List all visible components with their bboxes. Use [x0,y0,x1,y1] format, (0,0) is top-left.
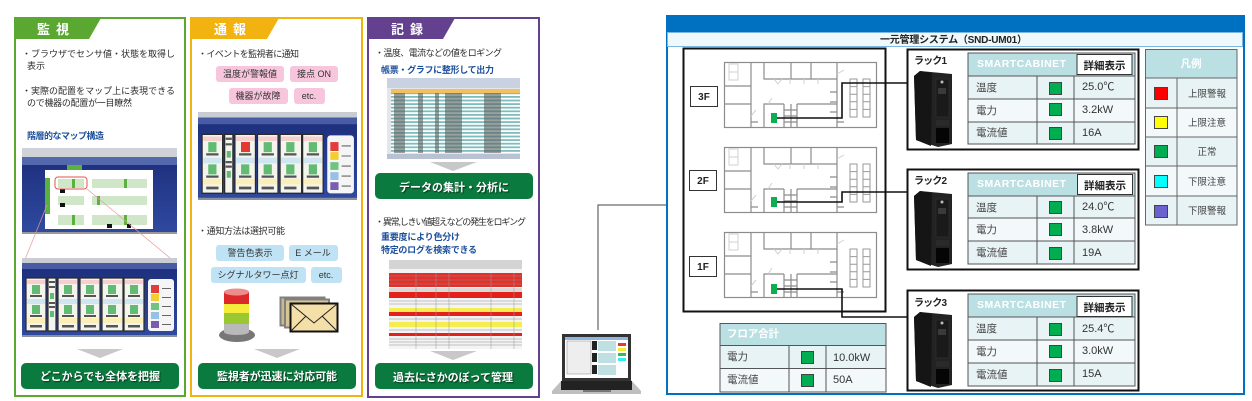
tags: methods: etc. [319,270,333,280]
table: floor total: 電力 [727,350,748,363]
tags: methods: 警告色表示 [227,247,273,258]
floor 2F: 2F [697,176,709,187]
table: floor total: 10.0kW [833,352,871,364]
heading: monitoring: 監 視 [37,22,69,37]
heading: monitoring [15,18,101,39]
table: rack 2 readings: 温度 [976,201,997,214]
subheading: severity colours: 特定のログを検索できる [381,244,477,255]
screenshot: spreadsheet [387,78,520,159]
legend: 凡例 [1180,57,1202,70]
icon: signal tower [219,288,255,342]
subheading: severity colours: 重要度により色分け [381,231,460,242]
panel: rack 1: ラック1 [914,55,947,67]
table: rack 3 readings: 電流値 [976,368,1008,381]
table: rack 2 readings: 3.8kW [1082,224,1114,236]
table: rack 3 readings: 温度 [976,322,997,335]
panel: notification [191,18,362,396]
table: rack 1 readings: 詳細表示 [1084,59,1126,72]
button: trace back [375,363,533,389]
button: quick response [198,363,356,389]
button: quick response: 監視者が迅速に対応可能 [217,369,337,383]
tags: methods [211,245,342,283]
panel: rack 1 [908,50,1138,150]
table: floor total: 50A [833,374,853,386]
floor 1F [690,232,876,298]
table: floor total: フロア合計 [727,327,780,340]
panel: rack 3 [908,290,1138,390]
panel: floor map [684,48,886,312]
screenshot: event log [389,260,522,349]
table: rack 1 readings: SMARTCABINET [977,58,1067,70]
table: floor total [720,323,886,392]
table: rack 1 readings: 温度 [976,81,997,94]
table: rack 1 readings: 25.0℃ [1082,81,1114,93]
legend: 上限注意 [1188,117,1226,129]
table: rack 1 readings: 3.2kW [1082,104,1114,116]
table: rack 2 readings [968,173,1135,264]
panel: rack 2: ラック2 [914,175,947,187]
table: rack 3 readings: SMARTCABINET [977,299,1067,311]
screenshot: rack view [22,258,177,337]
text: value logging: ・温度、電流などの値をロギング [375,47,502,58]
table: floor total: 電流値 [727,373,759,386]
tags: events [216,66,338,104]
floor 1F: 1F [697,262,709,273]
panel: unified management system [666,15,1244,394]
heading: logging: 記 録 [391,22,423,37]
icon: envelopes [280,298,338,332]
table: rack 1 readings: 電流値 [976,126,1008,139]
icon: laptop [552,334,641,394]
connector: floor 3F to rack 1 [777,83,907,118]
subheading: hierarchical map: 階層的なマップ構造 [27,130,104,141]
tags: events: etc. [302,91,316,101]
text: monitoring description: ・ブラウザでセンサ値・状態を取得し [22,48,175,59]
screenshot: alarm rack view [198,112,357,200]
legend: 正常 [1197,146,1217,158]
table: rack 3 readings: 25.4℃ [1082,323,1114,335]
tags: methods: E メール [295,248,331,258]
arrow [430,162,477,171]
table: rack 3 readings: 3.0kW [1082,345,1114,357]
system title: 一元管理システム（SND-UM01） [880,33,1027,46]
panel: rack 2 [908,170,1138,270]
heading: logging [368,18,455,39]
button: overview: どこからでも全体を把握 [40,369,160,383]
tags: events: 接点 ON [297,68,331,79]
header bar [666,15,1244,32]
arrow [430,351,477,360]
table: rack 1 readings: 電力 [976,104,997,117]
button: analysis [375,173,533,199]
table: rack 2 readings: 詳細表示 [1084,179,1126,192]
table: rack 1 readings: 16A [1082,127,1102,139]
text: anomaly logging: ・異常,しきい値超えなどの発生をロギング [375,216,526,227]
subheading: report output: 帳票・グラフに整形して出力 [381,64,494,75]
system title [668,32,1242,46]
tags: events: 機器が故障 [235,90,281,101]
button: trace back: 過去にさかのぼって管理 [393,370,513,384]
legend [1145,49,1237,225]
connector: floor 1F to rack 3 [777,289,907,317]
screenshot: map view [22,148,177,234]
arrow [77,349,123,358]
table: rack 3 readings: 15A [1082,368,1102,380]
heading: notification: 通 報 [214,22,246,37]
floor 2F [690,147,876,213]
text: notification method: ・通知方法は選択可能 [198,225,285,236]
button: analysis: データの集計・分析に [399,180,509,194]
table: rack 2 readings: 24.0℃ [1082,201,1114,213]
text: monitoring description: ・実際の配置をマップ上に表現できる [22,85,175,96]
subheading: severity colours [381,231,477,255]
arrow [254,349,300,358]
text: monitoring description: 表示 [27,61,45,71]
legend: 下限警報 [1188,205,1226,217]
panel: rack 3: ラック3 [914,297,947,309]
table: rack 2 readings: 電力 [976,223,997,236]
table: rack 3 readings: 電力 [976,345,997,358]
text: monitoring description [22,48,175,108]
connector: laptop to system [598,205,667,330]
connector lines: zoom from map [24,189,176,263]
table: rack 2 readings: SMARTCABINET [977,178,1067,190]
table: rack 2 readings: 電流値 [976,246,1008,259]
table: rack 2 readings: 19A [1082,247,1102,259]
floor 3F [690,62,876,128]
tags: events: 温度が警報値 [223,68,277,79]
panel: monitoring [15,18,185,396]
floor 3F: 3F [698,92,710,103]
table: rack 3 readings: 詳細表示 [1084,301,1126,314]
heading: notification [191,18,279,39]
panel: logging [368,18,539,397]
legend: 上限警報 [1188,88,1226,100]
button: overview [21,363,179,389]
text: monitoring description: ので機器の配置が一目瞭然 [27,97,132,108]
text: event notice: ・イベントを監視者に通知 [198,48,299,59]
legend: 下限注意 [1188,176,1226,188]
tags: methods: シグナルタワー点灯 [217,269,299,280]
table: rack 3 readings [968,294,1135,386]
table: rack 1 readings [968,53,1135,144]
connector: floor 2F to rack 2 [777,192,907,202]
